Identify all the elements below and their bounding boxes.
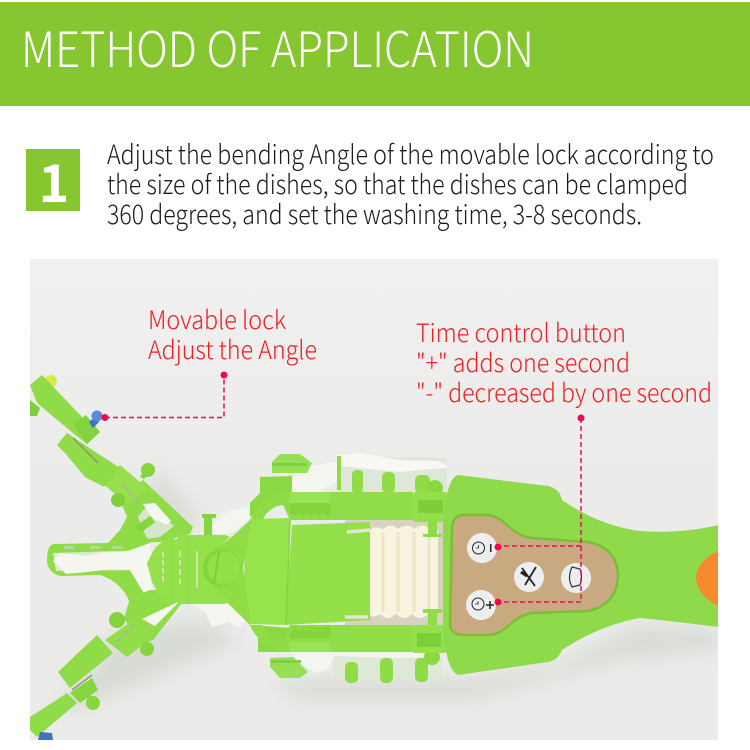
icon: blue pin upper	[89, 410, 102, 428]
handle	[443, 475, 719, 675]
button: cutlery	[514, 562, 544, 592]
icon: blue pin lower	[38, 732, 53, 740]
links	[57, 433, 120, 487]
step number badge	[26, 142, 80, 217]
callout label: time control button: "+" adds one second	[416, 343, 630, 380]
upper body with window	[107, 480, 193, 544]
step instructions: 360 degrees, and set the washing time, 3-8 seconds.	[107, 193, 642, 232]
step number badge: 1	[39, 142, 69, 217]
panel: product photo	[30, 259, 719, 740]
brush head: center arm with bristles	[47, 530, 152, 601]
button: time minus	[467, 533, 497, 563]
hinge	[105, 465, 140, 496]
hinge	[105, 624, 142, 657]
callout label: movable lock: Movable lock	[148, 300, 286, 337]
top roller brush	[250, 453, 447, 517]
button: bowl	[561, 563, 591, 593]
callout label: movable lock: Adjust the Angle	[148, 330, 317, 367]
clamp cover	[244, 518, 370, 625]
lower body	[124, 590, 182, 645]
header banner	[0, 2, 750, 106]
ribbed head and knob	[147, 518, 252, 626]
stud beside head	[202, 514, 216, 536]
yellow pin	[45, 375, 57, 387]
links	[58, 635, 113, 688]
bottom roller brush	[250, 625, 442, 683]
soft shadows	[60, 470, 718, 715]
title: METHOD OF APPLICATION	[21, 11, 534, 82]
brush head: upper arm	[30, 375, 193, 544]
bristles beside neck	[190, 506, 252, 628]
control panel	[450, 515, 618, 635]
step instructions	[107, 133, 714, 232]
callout label: time control button: "-" decreased by one second	[416, 373, 712, 410]
button: time plus	[466, 590, 496, 620]
green clamp bands	[250, 480, 448, 665]
sponge roller	[345, 520, 445, 626]
callout line: time control button	[494, 414, 584, 606]
callout label: movable lock	[148, 308, 316, 366]
callout label: time control button	[416, 322, 710, 408]
brush head: lower arm	[30, 590, 182, 737]
callout line: movable lock	[102, 372, 228, 421]
callout label: time control button: Time control button	[416, 313, 626, 350]
orange grip	[696, 550, 719, 607]
